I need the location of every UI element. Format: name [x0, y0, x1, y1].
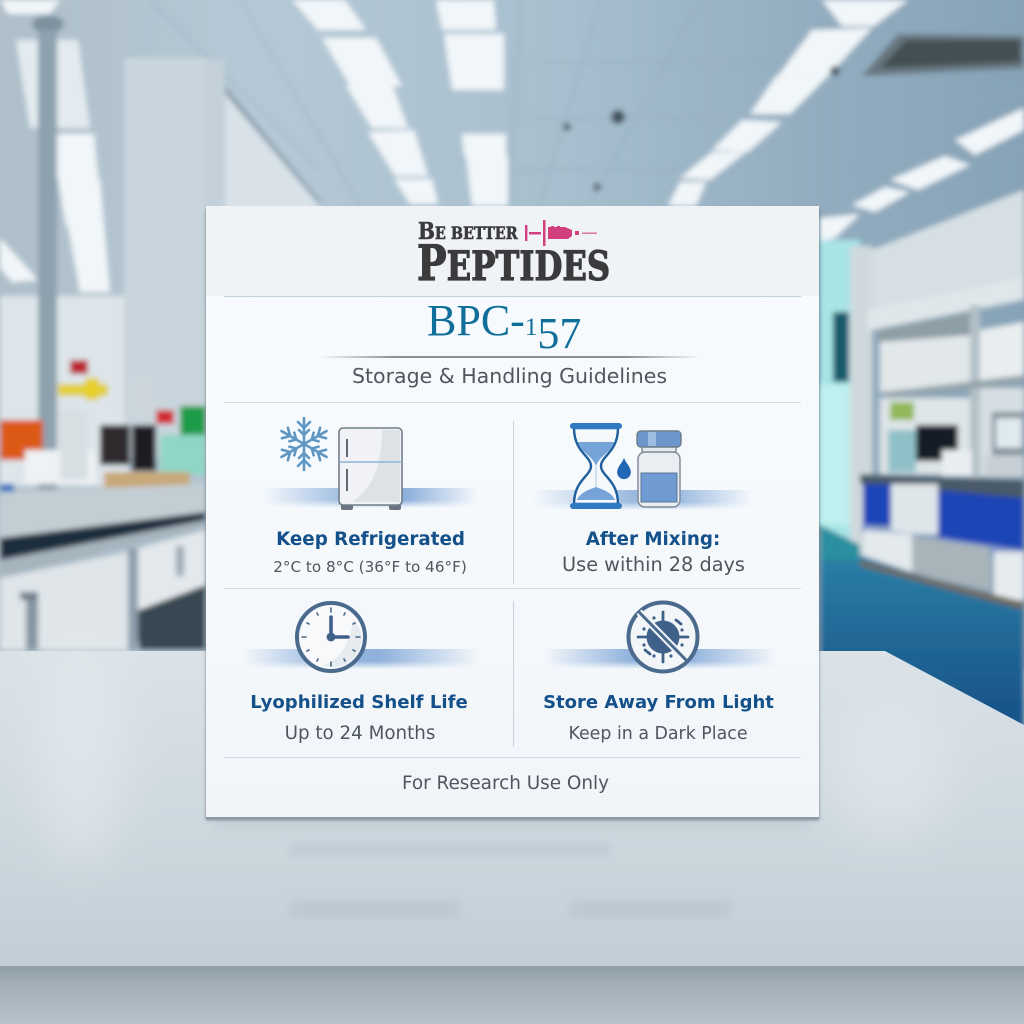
- shelving: [868, 278, 1024, 330]
- pole: [32, 15, 64, 33]
- detail text: Up to 24 Months: [285, 723, 435, 744]
- left counter: [0, 484, 206, 538]
- logo text: Be Better: BE BETTER: [418, 218, 518, 245]
- icon shelf: [544, 649, 776, 669]
- heading: Store Away From Light: [543, 692, 774, 713]
- left lab items: [0, 420, 43, 460]
- panel: store away from light: [543, 600, 774, 744]
- ceiling lights: [0, 0, 1024, 292]
- ceiling dots: [611, 110, 625, 124]
- vertical divider top: [513, 421, 514, 584]
- panel: after mixing: [540, 423, 746, 576]
- ceiling tile lines: [150, 0, 1024, 205]
- panel: lyophilized shelf life: [250, 601, 472, 744]
- floor: [820, 555, 1024, 730]
- logo icon: syringe: [525, 220, 597, 246]
- icon: no sunlight: [626, 600, 700, 674]
- sign card: [206, 206, 819, 817]
- heading: After Mixing:: [586, 529, 720, 550]
- vertical divider bottom: [513, 601, 514, 747]
- detail text: Use within 28 days: [562, 553, 745, 576]
- right room: teal wall: [820, 240, 860, 550]
- detail text: 2°C to 8°C (36°F to 46°F): [273, 558, 467, 576]
- icon shelf: [244, 649, 479, 669]
- heading: Keep Refrigerated: [276, 529, 465, 550]
- icon: clock: [295, 601, 367, 673]
- card reflection on table: [215, 820, 810, 918]
- ceiling vent: [862, 34, 1024, 76]
- foreground table: [0, 650, 1024, 1024]
- heading: Lyophilized Shelf Life: [250, 692, 468, 713]
- title: BPC-157: [427, 296, 581, 358]
- icon shelf: [262, 488, 478, 508]
- back wall left: [0, 296, 128, 486]
- logo header band: [206, 206, 819, 296]
- bench with blue cabinets: [860, 474, 1024, 498]
- icon: hourglass: [570, 423, 622, 509]
- panel: keep refrigerated: [269, 416, 472, 576]
- room scene: [0, 0, 1024, 730]
- column left: [124, 58, 208, 458]
- icon shelf: [532, 490, 752, 510]
- icon: refrigerator: [338, 427, 403, 510]
- logo text: Peptides: PEPTIDES: [417, 234, 610, 292]
- detail text: Keep in a Dark Place: [568, 724, 748, 744]
- subtitle: Storage & Handling Guidelines: [352, 364, 667, 388]
- icon: water drop: [617, 458, 631, 480]
- icon: snowflake: [280, 416, 328, 472]
- icon: vial: [636, 430, 682, 508]
- footer note: For Research Use Only: [402, 773, 609, 794]
